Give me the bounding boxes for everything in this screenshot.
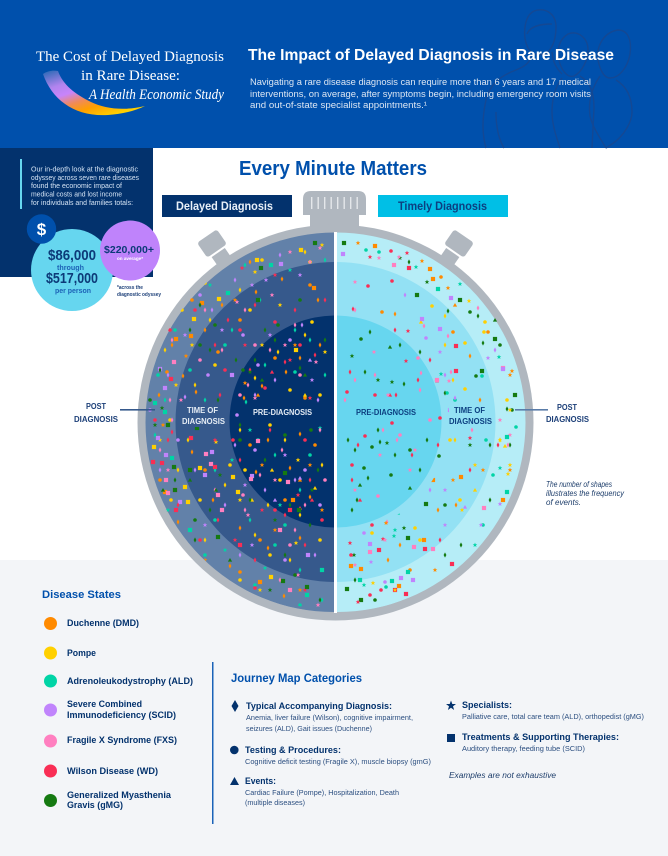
bottom legend background: [0, 560, 668, 856]
heading: every minute matters: Every Minute Matters: [239, 158, 427, 180]
category: specialists: Palliative care, total care team (ALD), orthopedist (gMG): [462, 714, 644, 721]
legend item: ALD: [44, 674, 193, 688]
economic impact text: Our in-depth look at the diagnostic: [31, 166, 138, 174]
footnote: across the odyssey: diagnostic odyssey: [117, 292, 161, 298]
header paragraph: and out-of-state specialist appointments.¹: [250, 100, 427, 110]
timely half rings: [337, 232, 526, 612]
stopwatch chart: [138, 191, 534, 620]
category: typical accompanying diagnosis: [232, 700, 413, 733]
label: timely diagnosis: Timely Diagnosis: [398, 199, 487, 213]
text: delayed pre-diagnosis: PRE-DIAGNOSIS: [253, 408, 313, 417]
note: number of shapes: of events.: [546, 498, 581, 507]
header heading: The Impact of Delayed Diagnosis in Rare Disease: [248, 47, 614, 64]
icon: dollar sign: $: [37, 220, 47, 239]
legend item: Fragile X: [44, 734, 177, 748]
legend item: SCID: Severe Combined: [67, 699, 142, 709]
event shapes: delayed diagnosis: [150, 243, 325, 605]
callout: post diagnosis left: DIAGNOSIS: [74, 415, 119, 424]
category: typical accompanying diagnosis: Typical Accompanying Diagnosis:: [246, 701, 392, 711]
text: delayed time of diagnosis: TIME OF: [187, 406, 218, 415]
per person cost bubble: $86,000: [48, 247, 96, 264]
stopwatch crown: [303, 191, 366, 230]
note: number of shapes: The number of shapes: [546, 480, 612, 489]
icon: dollar sign: [27, 214, 56, 244]
callout: post diagnosis right: [515, 403, 590, 424]
category: events: (multiple diseases): [245, 800, 305, 807]
study title: [36, 49, 224, 103]
category: typical accompanying diagnosis: seizures (ALD), Gait issues (Duchenne): [246, 726, 372, 733]
per person cost bubble: per person: [55, 286, 91, 295]
delayed half rings: [146, 232, 334, 612]
category: typical accompanying diagnosis: Anemia, liver failure (Wilson), cognitive impairment,: [246, 715, 413, 722]
header paragraph: Navigating a rare disease diagnosis can require more than 6 years and 17 medical: [250, 77, 591, 87]
legend item: SCID: [44, 699, 176, 720]
heading: journey map categories: Journey Map Categories: [231, 673, 362, 685]
label: timely diagnosis: [378, 195, 508, 217]
category: treatments and supporting therapies: Auditory therapy, feeding tube (SCID): [462, 746, 585, 753]
category: specialists: Specialists:: [462, 700, 512, 710]
legend item: Pompe: [44, 646, 96, 660]
category: events: Events:: [245, 776, 276, 786]
legend item: ALD: Adrenoleukodystrophy (ALD): [67, 676, 193, 686]
study title: A Health Economic Study: [88, 87, 224, 103]
study title: The Cost of Delayed Diagnosis: [36, 49, 224, 65]
category: treatments and supporting therapies: [447, 732, 619, 753]
stopwatch outer ring: [138, 224, 534, 620]
text: timely time of diagnosis: TIME OF: [454, 406, 485, 415]
note: examples not exhaustive: Examples are not exhaustive: [449, 771, 557, 780]
average cost bubble: $220,000+: [104, 245, 154, 256]
category: testing and procedures: Cognitive deficit testing (Fragile X), muscle biopsy (gmG): [245, 759, 431, 766]
callout: post diagnosis left: POST: [86, 402, 106, 411]
icon: colour swoosh: [43, 71, 145, 115]
economic impact text: found the economic impact of: [31, 183, 122, 190]
text: delayed time of diagnosis: [182, 406, 226, 426]
stopwatch button left: [197, 229, 236, 271]
category: events: [230, 776, 399, 807]
note: number of shapes: [546, 480, 625, 507]
icon: line art of family: [483, 10, 632, 148]
category: specialists: [446, 700, 644, 721]
economic impact text: medical costs and lost income: [31, 192, 122, 198]
legend item: gMG: Gravis (gMG): [67, 800, 123, 810]
note: number of shapes: illustrates the frequency: [546, 489, 625, 498]
text: timely time of diagnosis: [449, 406, 493, 426]
text: delayed time of diagnosis: DIAGNOSIS: [182, 417, 226, 426]
category: treatments and supporting therapies: Treatments & Supporting Therapies:: [462, 732, 619, 742]
callout: post diagnosis left: [74, 402, 155, 424]
footnote: across the odyssey: *across the: [117, 285, 143, 291]
legend item: Pompe: Pompe: [67, 648, 96, 658]
per person cost bubble: through: [57, 263, 84, 272]
header paragraph: [250, 77, 592, 110]
panel: economic impact: [0, 148, 161, 311]
category: testing and procedures: [230, 745, 431, 766]
callout: post diagnosis right: DIAGNOSIS: [546, 415, 590, 424]
centre divider: [334, 232, 337, 613]
legend item: SCID: Immunodeficiency (SCID): [67, 710, 176, 720]
category: testing and procedures: Testing & Procedures:: [245, 745, 341, 755]
study title: in Rare Disease:: [81, 68, 180, 84]
text: timely pre-diagnosis: PRE-DIAGNOSIS: [356, 408, 417, 417]
legend item: Fragile X: Fragile X Syndrome (FXS): [67, 735, 177, 745]
legend item: Duchenne: [44, 617, 139, 630]
average cost bubble: [100, 220, 160, 280]
callout: post diagnosis right: POST: [557, 403, 577, 412]
panel: journey map categories: [230, 673, 644, 807]
legend item: gMG: [44, 790, 172, 810]
legend item: Duchenne: Duchenne (DMD): [67, 618, 139, 628]
header banner: [0, 0, 668, 148]
legend item: Wilson: [44, 764, 158, 778]
header paragraph: interventions, on average, after symptoms begin, including emergency room visits: [250, 89, 592, 99]
label: delayed diagnosis: Delayed Diagnosis: [176, 199, 273, 213]
economic impact text: [31, 166, 139, 207]
per person cost bubble: $517,000: [46, 270, 98, 287]
footnote: across the odyssey: [117, 285, 161, 298]
legend item: gMG: Generalized Myasthenia: [67, 790, 172, 800]
event shapes: timely diagnosis, other colours: [343, 243, 516, 590]
heading: disease states: Disease States: [42, 589, 121, 601]
legend item: Wilson: Wilson Disease (WD): [67, 766, 158, 776]
economic impact text: odyssey across seven rare diseases: [31, 175, 139, 182]
average cost bubble: on average*: [117, 256, 143, 261]
economic impact text: for individuals and families totals:: [31, 200, 133, 207]
event shapes: timely diagnosis, green pink red: [344, 243, 515, 602]
stopwatch button right: [435, 229, 474, 271]
per person cost bubble: [31, 229, 113, 311]
label: delayed diagnosis: [162, 195, 292, 217]
category: events: Cardiac Failure (Pompe), Hospitalization, Death: [245, 790, 399, 797]
panel: disease states legend: [42, 589, 193, 810]
text: timely time of diagnosis: DIAGNOSIS: [449, 417, 493, 426]
